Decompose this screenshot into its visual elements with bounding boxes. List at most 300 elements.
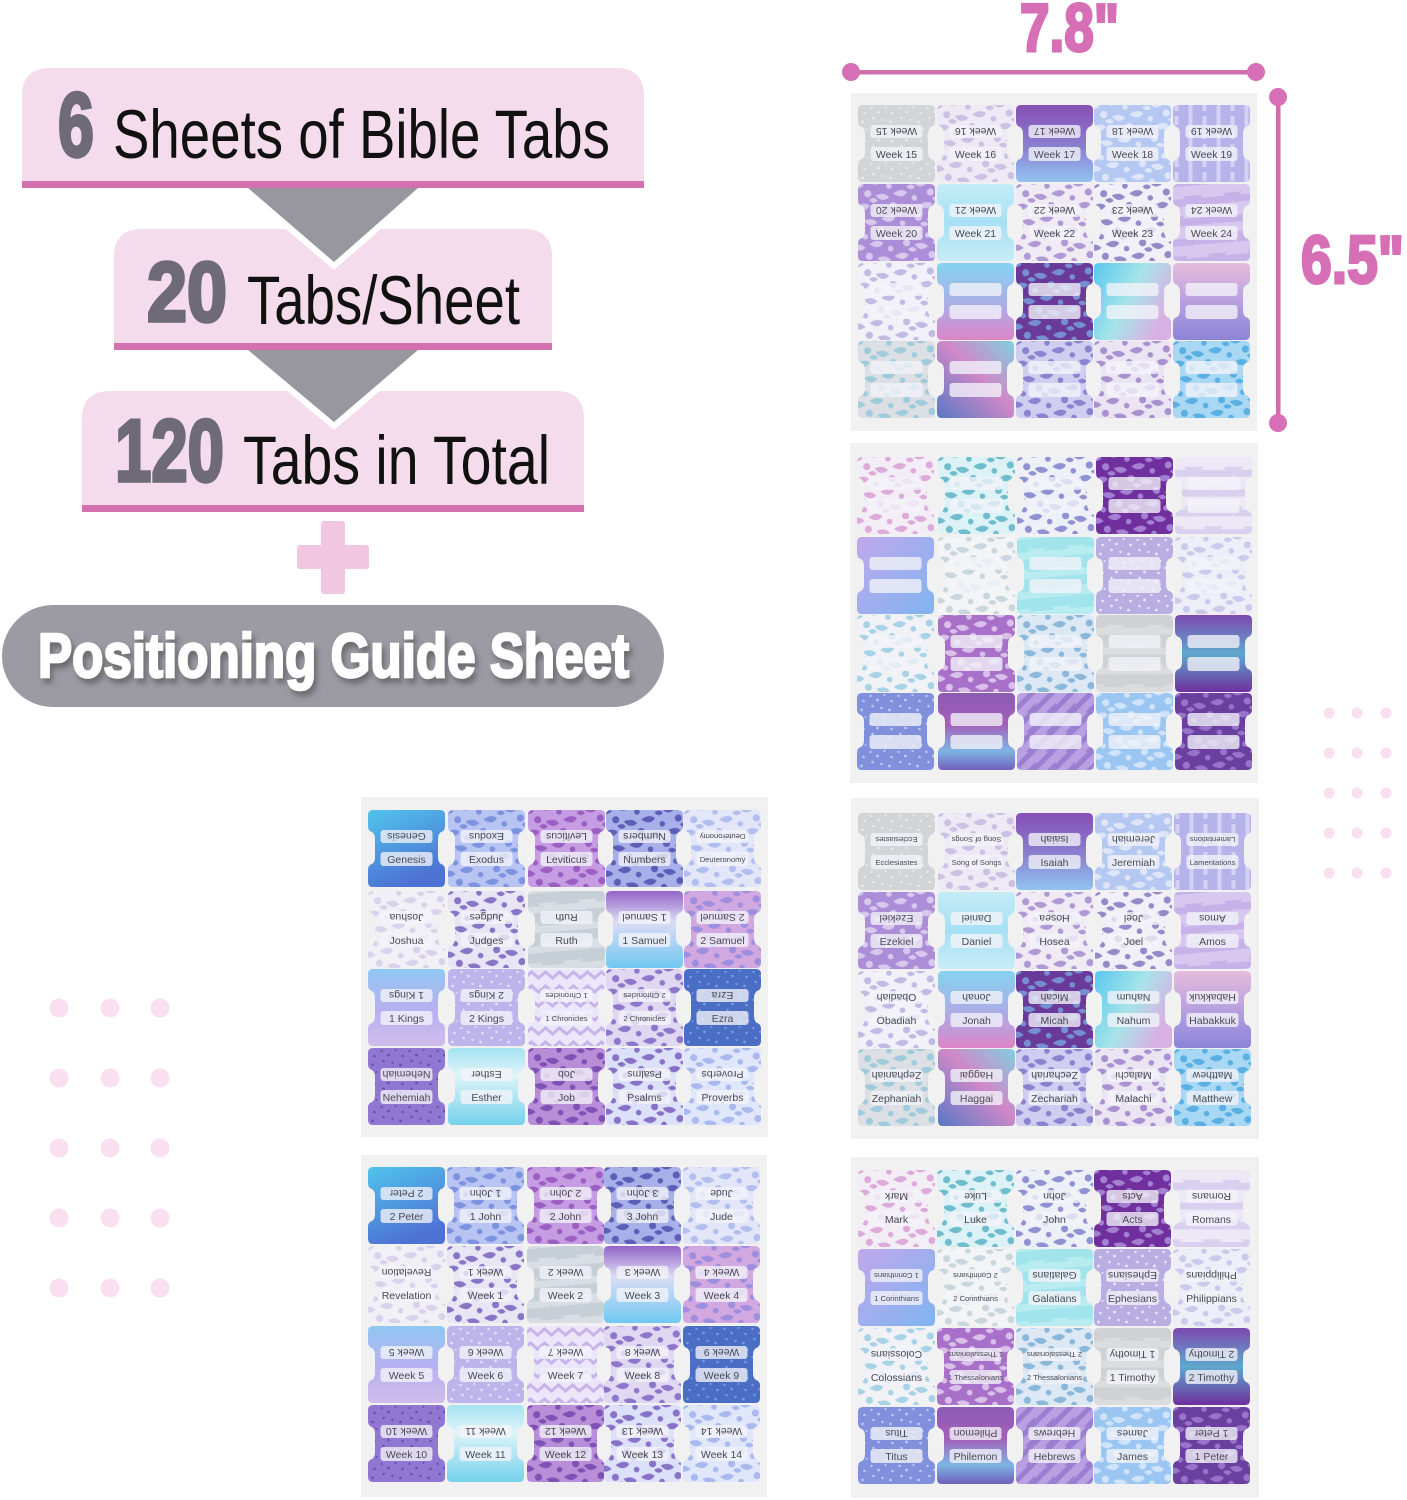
tab: Ezra xyxy=(684,969,761,1046)
tab: Judges: Judges xyxy=(470,911,503,923)
tab: 2 Thessalonians xyxy=(1016,1328,1093,1405)
tab: 1 John: 1 John xyxy=(470,1211,501,1223)
tab: 2 John: 2 John xyxy=(550,1187,581,1199)
tab: Habakkuk: Habakkuk xyxy=(1189,1015,1237,1027)
tab: 1 Kings: 1 Kings xyxy=(389,989,424,1001)
tab: Job xyxy=(528,1048,605,1125)
tab: Leviticus: Leviticus xyxy=(546,854,587,866)
tab: Genesis: Genesis xyxy=(387,830,426,842)
tab: Matthew xyxy=(1174,1049,1251,1126)
decoration: left dot grid xyxy=(50,998,170,1298)
tab: Week 9: Week 9 xyxy=(704,1370,739,1382)
tab: blank 4 xyxy=(1094,263,1171,340)
tab: Week 13 xyxy=(604,1405,681,1482)
tab: Week 18: Week 18 xyxy=(1112,125,1153,137)
tab: blank 3 xyxy=(1017,457,1094,534)
tab: Revelation: Revelation xyxy=(382,1266,431,1278)
tab: 2 Samuel xyxy=(684,891,761,968)
panel: 6 sheets of Bible tabs xyxy=(22,68,644,188)
tab: 2 Chronicles: 2 Chronicles xyxy=(623,1014,666,1023)
tab: Week 15: Week 15 xyxy=(876,149,917,161)
tab: Zephaniah xyxy=(858,1049,935,1126)
tab: 1 Samuel xyxy=(606,891,683,968)
tab: blank 5 xyxy=(1175,457,1252,534)
panel: 6 sheets of Bible tabs: Sheets of Bible Tabs xyxy=(113,96,610,173)
tab: Week 12 xyxy=(527,1405,604,1482)
tab: Week 5: Week 5 xyxy=(389,1370,424,1382)
tab: Genesis: Genesis xyxy=(387,854,426,866)
tab: Ezekiel xyxy=(858,892,935,969)
tab: Zephaniah: Zephaniah xyxy=(872,1093,921,1105)
tab: Zephaniah: Zephaniah xyxy=(872,1069,921,1081)
tab: Joshua xyxy=(368,891,445,968)
tab: 2 John xyxy=(527,1167,604,1244)
tab: Philippians: Philippians xyxy=(1186,1293,1237,1305)
tab: Week 17: Week 17 xyxy=(1034,125,1075,137)
tab: Week 10: Week 10 xyxy=(386,1425,427,1437)
tab: Proverbs: Proverbs xyxy=(701,1092,744,1104)
tab: Week 14 xyxy=(683,1405,760,1482)
tab: Week 22: Week 22 xyxy=(1034,204,1075,216)
tab: Exodus: Exodus xyxy=(469,830,504,842)
tab: 1 Timothy: 1 Timothy xyxy=(1109,1348,1155,1360)
tab: Esther: Esther xyxy=(471,1068,502,1080)
tab: Week 12: Week 12 xyxy=(545,1425,586,1437)
tab: Jude: Jude xyxy=(710,1211,733,1223)
tab: Zechariah xyxy=(1016,1049,1093,1126)
tab: 2 Thessalonians: 2 Thessalonians xyxy=(1027,1350,1082,1359)
tab: blank 11 xyxy=(857,615,934,692)
tab: Colossians: Colossians xyxy=(871,1372,922,1384)
tab: Deuteronomy: Deuteronomy xyxy=(700,855,745,864)
tab: 1 Peter xyxy=(1173,1407,1250,1484)
tab: blank 1 xyxy=(857,457,934,534)
tab: Jeremiah xyxy=(1095,813,1172,890)
icon: plus sign xyxy=(297,521,369,594)
tab: Week 11: Week 11 xyxy=(465,1425,506,1437)
tab: Malachi: Malachi xyxy=(1115,1069,1152,1081)
tab: Isaiah xyxy=(1016,813,1093,890)
height dimension: 6.5 inches xyxy=(1269,88,1404,432)
callout: positioning guide sheet pill xyxy=(2,605,664,707)
tab: blank 7 xyxy=(938,537,1015,614)
tab: 1 Corinthians: 1 Corinthians xyxy=(874,1271,919,1280)
tab: Ezekiel: Ezekiel xyxy=(880,912,913,924)
tab: Song of Songs: Song of Songs xyxy=(952,858,1002,867)
tab: Haggai xyxy=(938,1049,1015,1126)
panel: 120 tabs in total: 120 xyxy=(115,401,224,500)
panel: 20 tabs per sheet: 20 xyxy=(147,245,227,339)
tab: Week 11: Week 11 xyxy=(465,1449,506,1461)
tab: Week 4 xyxy=(683,1246,760,1323)
tab: 2 Samuel: 2 Samuel xyxy=(700,935,745,947)
tab: blank 17 xyxy=(938,693,1015,770)
tab: Acts: Acts xyxy=(1122,1190,1143,1202)
tab: 2 Corinthians: 2 Corinthians xyxy=(953,1271,998,1280)
tab: blank 15 xyxy=(1175,615,1252,692)
tab: Week 8 xyxy=(604,1326,681,1403)
tab: Matthew: Matthew xyxy=(1192,1069,1232,1081)
tab: 2 Peter: 2 Peter xyxy=(389,1187,423,1199)
tab: Ephesians: Ephesians xyxy=(1108,1269,1157,1281)
tab: Romans: Romans xyxy=(1192,1190,1231,1202)
tab: Week 5: Week 5 xyxy=(389,1346,424,1358)
panel: 20 tabs per sheet xyxy=(114,229,552,350)
decoration: right dot grid xyxy=(1324,708,1392,878)
tab: 2 Kings: 2 Kings xyxy=(469,1013,504,1025)
tab: Week 21: Week 21 xyxy=(955,204,996,216)
tab: Jeremiah: Jeremiah xyxy=(1112,857,1155,869)
tab: 1 Chronicles: 1 Chronicles xyxy=(545,991,588,1000)
tab: Psalms: Psalms xyxy=(627,1092,662,1104)
tab: Isaiah: Isaiah xyxy=(1040,857,1069,869)
tab: 1 Kings xyxy=(368,969,445,1046)
tab: blank 10 xyxy=(1175,537,1252,614)
tab: 2 Peter: 2 Peter xyxy=(390,1211,424,1223)
tab: Week 23 xyxy=(1094,184,1171,261)
tab: Week 22: Week 22 xyxy=(1034,228,1075,240)
tab: 1 Thessalonians xyxy=(937,1328,1014,1405)
tab: Judges xyxy=(448,891,525,968)
tab: Malachi: Malachi xyxy=(1115,1093,1152,1105)
tab: Joshua: Joshua xyxy=(389,911,423,923)
tab: Week 6: Week 6 xyxy=(468,1370,503,1382)
tab: Week 1: Week 1 xyxy=(468,1266,503,1278)
arrow: second down triangle xyxy=(238,350,428,430)
tab: Daniel: Daniel xyxy=(962,936,991,948)
tab: blank 19 xyxy=(1096,693,1173,770)
tab: Jude xyxy=(683,1167,760,1244)
tab: blank 13 xyxy=(1017,615,1094,692)
tab: Philemon: Philemon xyxy=(954,1451,998,1463)
tab: Galatians: Galatians xyxy=(1032,1293,1077,1305)
tab: Ezra: Ezra xyxy=(712,989,733,1001)
tab: Galatians: Galatians xyxy=(1032,1269,1077,1281)
tab: Leviticus xyxy=(528,810,605,887)
panel: 20 tabs per sheet: Tabs/Sheet xyxy=(247,262,520,339)
tab: Joshua: Joshua xyxy=(390,935,424,947)
tab: 3 John: 3 John xyxy=(627,1211,658,1223)
tab: Week 4: Week 4 xyxy=(704,1290,739,1302)
tab: Week 19: Week 19 xyxy=(1191,125,1232,137)
tab: Amos xyxy=(1174,892,1251,969)
tab: Hosea xyxy=(1016,892,1093,969)
tab: Week 6: Week 6 xyxy=(468,1346,503,1358)
tab: blank 8 xyxy=(1017,537,1094,614)
tab: Numbers xyxy=(606,810,683,887)
tab: Exodus: Exodus xyxy=(469,854,504,866)
tab: John xyxy=(1016,1170,1093,1247)
tab: Ezekiel: Ezekiel xyxy=(880,936,913,948)
tab: Numbers: Numbers xyxy=(623,830,666,842)
tab: blank 18 xyxy=(1017,693,1094,770)
tab: Habakkuk xyxy=(1174,971,1251,1048)
tab: Matthew: Matthew xyxy=(1193,1093,1233,1105)
tab: 1 Timothy xyxy=(1094,1328,1171,1405)
tab: John: John xyxy=(1043,1214,1066,1226)
tab: Week 5 xyxy=(368,1326,445,1403)
tab: 2 Samuel: 2 Samuel xyxy=(700,911,745,923)
tab: Nehemiah xyxy=(368,1048,445,1125)
tab: 2 Timothy xyxy=(1173,1328,1250,1405)
tab: Ephesians xyxy=(1094,1249,1171,1326)
tab: blank 5 xyxy=(1173,263,1250,340)
tab: 1 Chronicles xyxy=(528,969,605,1046)
tab: Psalms xyxy=(606,1048,683,1125)
tab: Week 15: Week 15 xyxy=(876,125,917,137)
tab: James: James xyxy=(1117,1427,1148,1439)
tab: Week 23: Week 23 xyxy=(1112,228,1153,240)
tab: Acts xyxy=(1094,1170,1171,1247)
tab: Ruth: Ruth xyxy=(555,935,578,947)
tab: blank 9 xyxy=(1094,341,1171,418)
tab: Week 16: Week 16 xyxy=(955,125,996,137)
tab: Week 7 xyxy=(527,1326,604,1403)
tab: Week 20: Week 20 xyxy=(876,228,917,240)
tab: Week 8: Week 8 xyxy=(625,1346,660,1358)
tab: blank 6 xyxy=(858,341,935,418)
tab: blank 8 xyxy=(1016,341,1093,418)
width dimension: 7.8 inches xyxy=(842,0,1265,81)
tab: Week 3: Week 3 xyxy=(625,1266,660,1278)
tab: Haggai: Haggai xyxy=(960,1069,993,1081)
tab: Week 7: Week 7 xyxy=(548,1346,583,1358)
sheet: 2 Peter to Week 14 xyxy=(361,1155,767,1497)
tab: Week 3 xyxy=(604,1246,681,1323)
tab: Week 10: Week 10 xyxy=(386,1449,427,1461)
sheet: all blank tabs xyxy=(850,443,1258,783)
tab: 1 Thessalonians: 1 Thessalonians xyxy=(948,1350,1003,1359)
tab: Week 2: Week 2 xyxy=(548,1290,583,1302)
tab: Job: Job xyxy=(558,1092,575,1104)
tab: Jonah: Jonah xyxy=(962,1015,991,1027)
tab: Week 2 xyxy=(527,1246,604,1323)
tab: Week 2: Week 2 xyxy=(548,1266,583,1278)
tab: Nehemiah: Nehemiah xyxy=(382,1068,430,1080)
tab: 2 Corinthians xyxy=(937,1249,1014,1326)
tab: Nahum: Nahum xyxy=(1116,991,1150,1003)
tab: Nehemiah: Nehemiah xyxy=(383,1092,431,1104)
tab: blank 20 xyxy=(1175,693,1252,770)
panel: 120 tabs in total xyxy=(82,391,584,512)
tab: Ecclesiastes: Ecclesiastes xyxy=(875,835,918,844)
tab: Week 9 xyxy=(683,1326,760,1403)
tab: Week 9: Week 9 xyxy=(704,1346,739,1358)
sheet: Mark to 1 Peter xyxy=(851,1157,1259,1498)
tab: 2 Chronicles xyxy=(606,969,683,1046)
tab: Joel xyxy=(1095,892,1172,969)
panel: 6 sheets of Bible tabs: 6 xyxy=(58,75,94,176)
tab: 2 Thessalonians: 2 Thessalonians xyxy=(1027,1373,1082,1382)
tab: Revelation xyxy=(368,1246,445,1323)
tab: Week 18: Week 18 xyxy=(1112,149,1153,161)
tab: Micah: Micah xyxy=(1040,1015,1069,1027)
tab: Week 17 xyxy=(1016,105,1093,182)
tab: Judges: Judges xyxy=(470,935,503,947)
tab: Micah xyxy=(1016,971,1093,1048)
tab: Joel: Joel xyxy=(1124,912,1143,924)
tab: Exodus xyxy=(448,810,525,887)
tab: Week 13: Week 13 xyxy=(622,1449,663,1461)
tab: Week 1: Week 1 xyxy=(468,1290,503,1302)
tab: Luke: Luke xyxy=(964,1190,987,1202)
tab: Week 10 xyxy=(368,1405,445,1482)
tab: 1 John xyxy=(447,1167,524,1244)
tab: Week 19: Week 19 xyxy=(1191,149,1232,161)
tab: 2 Peter xyxy=(368,1167,445,1244)
tab: Nahum: Nahum xyxy=(1117,1015,1151,1027)
tab: Hosea: Hosea xyxy=(1039,936,1070,948)
sheet: weeks 15-24 and blank tabs xyxy=(851,93,1257,431)
tab: Song of Songs xyxy=(938,813,1015,890)
tab: Ecclesiastes: Ecclesiastes xyxy=(875,858,918,867)
tab: Week 3: Week 3 xyxy=(625,1290,660,1302)
tab: 1 Peter: 1 Peter xyxy=(1195,1451,1229,1463)
tab: Week 16 xyxy=(937,105,1014,182)
tab: Obadiah: Obadiah xyxy=(877,1015,917,1027)
tab: Micah: Micah xyxy=(1040,991,1069,1003)
tab: Daniel: Daniel xyxy=(962,912,991,924)
tab: 1 Corinthians: 1 Corinthians xyxy=(874,1294,919,1303)
tab: Week 22 xyxy=(1016,184,1093,261)
tab: Esther xyxy=(448,1048,525,1125)
tab: 2 Timothy: 2 Timothy xyxy=(1188,1348,1234,1360)
tab: Colossians xyxy=(858,1328,935,1405)
tab: blank 12 xyxy=(938,615,1015,692)
tab: Ecclesiastes xyxy=(858,813,935,890)
tab: 3 John: 3 John xyxy=(627,1187,658,1199)
tab: 1 Corinthians xyxy=(858,1249,935,1326)
tab: Week 19 xyxy=(1173,105,1250,182)
tab: Week 11 xyxy=(447,1405,524,1482)
tab: Genesis xyxy=(368,810,445,887)
tab: 2 Kings: 2 Kings xyxy=(469,989,504,1001)
tab: blank 14 xyxy=(1096,615,1173,692)
tab: Titus: Titus xyxy=(885,1451,908,1463)
tab: Week 7: Week 7 xyxy=(548,1370,583,1382)
tab: blank 1 xyxy=(858,263,935,340)
tab: Amos: Amos xyxy=(1199,936,1226,948)
tab: 1 Samuel: 1 Samuel xyxy=(622,911,667,923)
tab: blank 4 xyxy=(1096,457,1173,534)
arrow: first down triangle xyxy=(238,188,428,270)
tab: Week 15 xyxy=(858,105,935,182)
tab: Week 24: Week 24 xyxy=(1191,228,1232,240)
tab: Proverbs: Proverbs xyxy=(701,1068,744,1080)
tab: James: James xyxy=(1117,1451,1148,1463)
callout: positioning guide sheet pill: Positioning Guide Sheet xyxy=(38,622,629,691)
tab: Ruth xyxy=(528,891,605,968)
tab: Week 20: Week 20 xyxy=(876,204,917,216)
tab: blank 3 xyxy=(1016,263,1093,340)
tab: Acts: Acts xyxy=(1122,1214,1143,1226)
tab: Week 14: Week 14 xyxy=(701,1425,742,1437)
tab: 2 Kings xyxy=(448,969,525,1046)
tab: Esther: Esther xyxy=(471,1092,502,1104)
tab: Revelation: Revelation xyxy=(382,1290,431,1302)
tab: 2 Chronicles: 2 Chronicles xyxy=(623,991,666,1000)
tab: blank 9 xyxy=(1096,537,1173,614)
tab: Week 13: Week 13 xyxy=(622,1425,663,1437)
tab: Ruth: Ruth xyxy=(555,911,578,923)
tab: Week 23: Week 23 xyxy=(1112,204,1153,216)
tab: 2 Timothy: 2 Timothy xyxy=(1189,1372,1235,1384)
tab: Leviticus: Leviticus xyxy=(546,830,587,842)
tab: John: John xyxy=(1043,1190,1066,1202)
tab: Song of Songs: Song of Songs xyxy=(951,835,1001,844)
tab: Week 24 xyxy=(1173,184,1250,261)
sheet: Genesis to Proverbs xyxy=(361,797,768,1137)
tab: 1 Kings: 1 Kings xyxy=(389,1013,424,1025)
tab: Psalms: Psalms xyxy=(627,1068,662,1080)
tab: Week 21: Week 21 xyxy=(955,228,996,240)
tab: blank 2 xyxy=(938,457,1015,534)
tab: Obadiah xyxy=(858,971,935,1048)
tab: Week 8: Week 8 xyxy=(625,1370,660,1382)
tab: Haggai: Haggai xyxy=(960,1093,993,1105)
tab: Proverbs xyxy=(684,1048,761,1125)
tab: Week 12: Week 12 xyxy=(545,1449,586,1461)
tab: Lamentations: Lamentations xyxy=(1190,858,1235,867)
tab: Mark: Mark xyxy=(885,1214,909,1226)
tab: Nahum xyxy=(1095,971,1172,1048)
tab: blank 16 xyxy=(857,693,934,770)
tab: Hebrews: Hebrews xyxy=(1034,1427,1075,1439)
tab: Philemon: Philemon xyxy=(953,1427,997,1439)
tab: Week 20 xyxy=(858,184,935,261)
tab: Week 6 xyxy=(447,1326,524,1403)
tab: Jonah xyxy=(938,971,1015,1048)
tab: Colossians: Colossians xyxy=(871,1348,922,1360)
tab: Jonah: Jonah xyxy=(962,991,991,1003)
tab: 1 Samuel: 1 Samuel xyxy=(622,935,667,947)
tab: 1 Peter: 1 Peter xyxy=(1194,1427,1228,1439)
tab: Week 21 xyxy=(937,184,1014,261)
tab: 2 Corinthians: 2 Corinthians xyxy=(953,1294,998,1303)
tab: Zechariah: Zechariah xyxy=(1031,1093,1078,1105)
tab: Deuteronomy xyxy=(684,810,761,887)
tab: Philippians: Philippians xyxy=(1186,1269,1237,1281)
panel: 120 tabs in total: Tabs in Total xyxy=(243,422,550,499)
tab: Week 17: Week 17 xyxy=(1034,149,1075,161)
tab: Hebrews xyxy=(1016,1407,1093,1484)
tab: 3 John xyxy=(604,1167,681,1244)
tab: Zechariah: Zechariah xyxy=(1031,1069,1078,1081)
tab: Daniel xyxy=(938,892,1015,969)
tab: Titus xyxy=(858,1407,935,1484)
tab: blank 2 xyxy=(937,263,1014,340)
tab: Joel: Joel xyxy=(1124,936,1143,948)
tab: Obadiah: Obadiah xyxy=(876,991,916,1003)
tab: Job: Job xyxy=(558,1068,575,1080)
tab: Philippians xyxy=(1173,1249,1250,1326)
tab: Ephesians: Ephesians xyxy=(1108,1293,1157,1305)
tab: Deuteronomy: Deuteronomy xyxy=(700,832,745,841)
tab: 1 Timothy: 1 Timothy xyxy=(1110,1372,1156,1384)
tab: Luke xyxy=(937,1170,1014,1247)
tab: Week 18 xyxy=(1094,105,1171,182)
tab: Isaiah: Isaiah xyxy=(1040,833,1069,845)
tab: Luke: Luke xyxy=(964,1214,987,1226)
tab: Galatians xyxy=(1016,1249,1093,1326)
tab: Romans xyxy=(1173,1170,1250,1247)
tab: Week 1 xyxy=(447,1246,524,1323)
tab: Week 16: Week 16 xyxy=(955,149,996,161)
tab: Jude: Jude xyxy=(710,1187,733,1199)
tab: Malachi xyxy=(1095,1049,1172,1126)
tab: Mark: Mark xyxy=(884,1190,908,1202)
tab: Hebrews: Hebrews xyxy=(1034,1451,1075,1463)
